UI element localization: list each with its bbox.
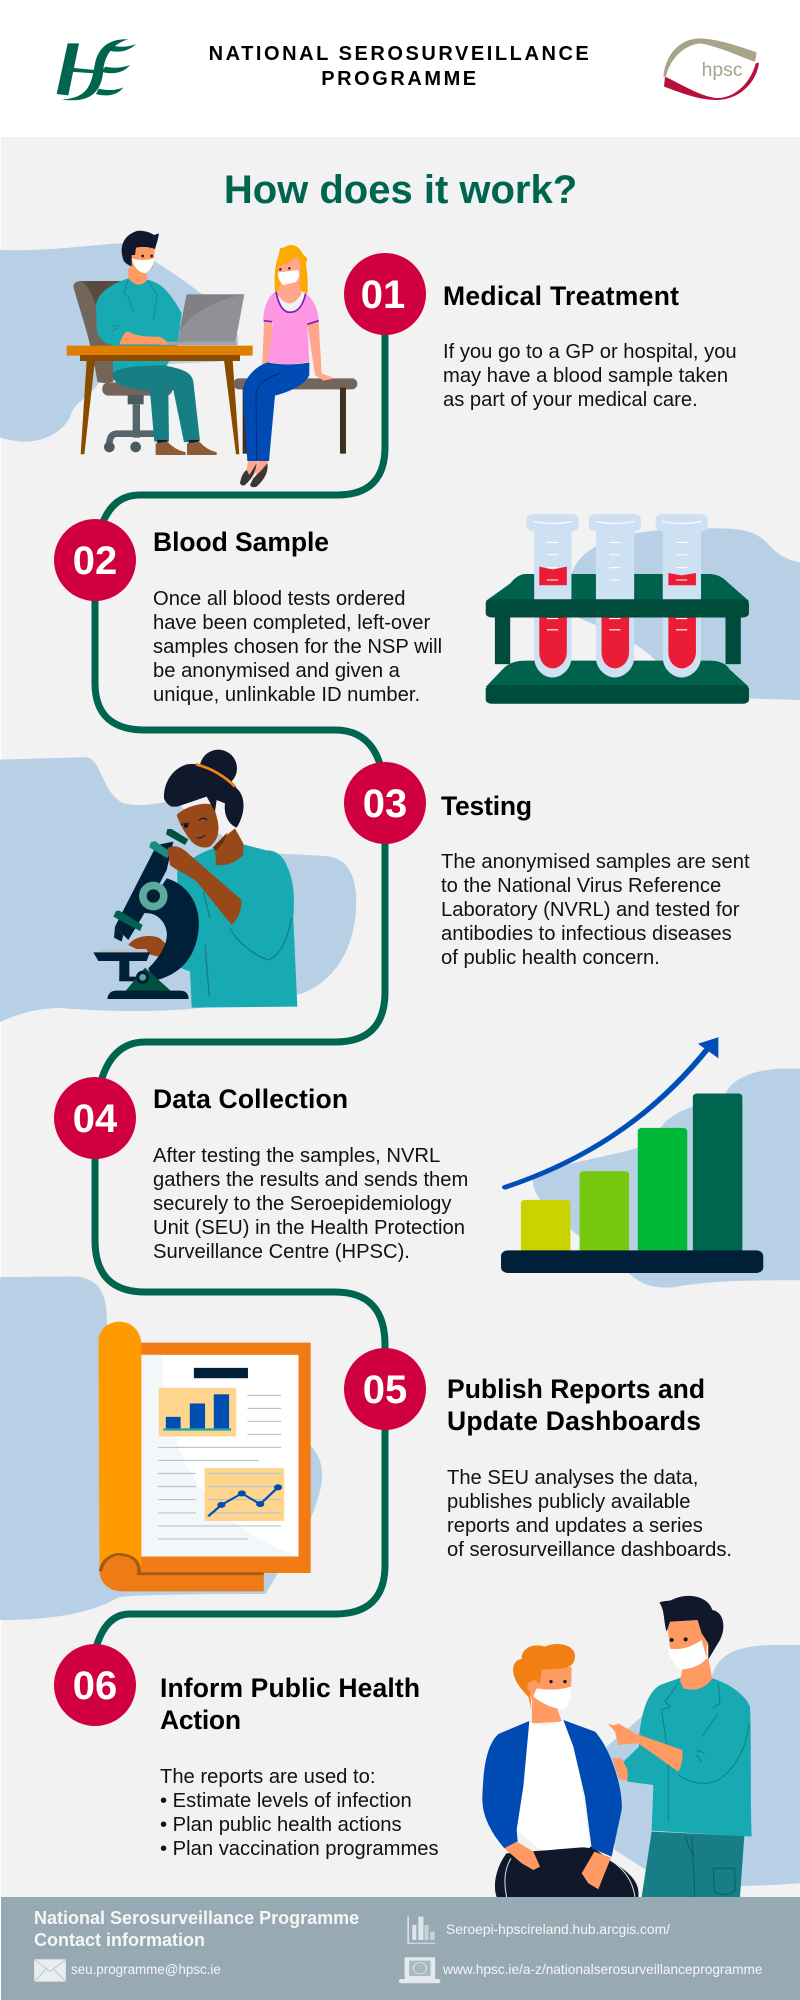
website link: www.hpsc.ie/a-z/nationalserosurveillanceprogramme bbox=[442, 1962, 763, 1977]
body text: have been completed, left-over bbox=[153, 612, 430, 634]
icon: envelope bbox=[34, 1959, 66, 1982]
body text: After testing the samples, NVRL bbox=[153, 1145, 440, 1167]
heading: Testing: Testing bbox=[441, 791, 532, 821]
body text bbox=[441, 851, 750, 969]
title: programme name: NATIONAL SEROSURVEILLANCE bbox=[209, 43, 591, 65]
icon: HSE logo bbox=[57, 39, 136, 100]
connecting path bbox=[90, 294, 385, 1685]
step 03 bbox=[344, 762, 750, 969]
body text: may have a blood sample taken bbox=[443, 365, 728, 387]
body text: If you go to a GP or hospital, you bbox=[443, 341, 737, 363]
body text: Unit (SEU) in the Health Protection bbox=[153, 1217, 465, 1239]
heading: Inform Public Health Action: Inform Public Health bbox=[160, 1673, 420, 1703]
body text: reports and updates a series bbox=[447, 1515, 703, 1537]
heading: Medical Treatment: Medical Treatment bbox=[443, 281, 679, 311]
step 01 bbox=[344, 253, 737, 411]
header band bbox=[57, 38, 759, 100]
body text: to the National Virus Reference bbox=[441, 875, 721, 897]
body text bbox=[153, 588, 442, 706]
heading: How does it work? bbox=[224, 168, 577, 212]
title: programme name: PROGRAMME bbox=[321, 68, 479, 90]
number badge 02 bbox=[54, 519, 136, 601]
body text: of public health concern. bbox=[441, 947, 660, 969]
icon: laptop globe bbox=[399, 1957, 440, 1983]
illustration: scientist with microscope bbox=[93, 750, 297, 1008]
body text: unique, unlinkable ID number. bbox=[153, 684, 420, 706]
body text: of serosurveillance dashboards. bbox=[447, 1539, 732, 1561]
heading: Publish Reports and Update Dashboards: Update Dashboards bbox=[447, 1406, 701, 1436]
number badge 01 bbox=[344, 253, 426, 335]
heading: Inform Public Health Action: Action bbox=[160, 1705, 241, 1735]
body text: The reports are used to: bbox=[160, 1766, 375, 1788]
footer heading: National Serosurveillance Programme bbox=[34, 1908, 359, 1928]
body text bbox=[160, 1766, 439, 1860]
number badge 03: 03 bbox=[363, 782, 407, 826]
icon: hpsc logo bbox=[663, 38, 759, 100]
number badge 05: 05 bbox=[363, 1368, 407, 1412]
dashboard link: Seroepi-hpscireland.hub.arcgis.com/ bbox=[446, 1922, 670, 1937]
number badge 04 bbox=[54, 1077, 136, 1159]
body text: antibodies to infectious diseases bbox=[441, 923, 732, 945]
number badge 03 bbox=[344, 762, 426, 844]
icon: dashboard bars bbox=[408, 1917, 435, 1943]
body text bbox=[153, 1145, 468, 1263]
heading: Publish Reports and Update Dashboards: Publish Reports and bbox=[447, 1374, 705, 1404]
number badge 01: 01 bbox=[361, 273, 405, 317]
heading: Blood Sample: Blood Sample bbox=[153, 527, 329, 557]
step 05 bbox=[344, 1348, 732, 1561]
bar chart with rising arrow bbox=[501, 1037, 763, 1273]
heading: Inform Public Health Action bbox=[160, 1673, 420, 1735]
body text: Laboratory (NVRL) and tested for bbox=[441, 899, 740, 921]
body text: • Plan public health actions bbox=[160, 1814, 402, 1836]
heading: Data Collection: Data Collection bbox=[153, 1084, 348, 1114]
body text bbox=[447, 1467, 732, 1561]
body text bbox=[443, 341, 737, 411]
footer heading bbox=[34, 1908, 359, 1950]
heading: Publish Reports and Update Dashboards bbox=[447, 1374, 705, 1436]
body text: samples chosen for the NSP will bbox=[153, 636, 442, 658]
body text: as part of your medical care. bbox=[443, 389, 698, 411]
body text: be anonymised and given a bbox=[153, 660, 401, 682]
number badge 06 bbox=[54, 1644, 136, 1726]
title: programme name bbox=[209, 43, 591, 90]
footer heading: Contact information bbox=[34, 1930, 205, 1950]
body text: securely to the Seroepidemiology bbox=[153, 1193, 452, 1215]
email: seu.programme@hpsc.ie bbox=[71, 1962, 221, 1977]
step 04 bbox=[54, 1077, 468, 1263]
illustration: report folder bbox=[98, 1322, 311, 1591]
number badge 04: 04 bbox=[73, 1097, 118, 1141]
body text: Surveillance Centre (HPSC). bbox=[153, 1241, 410, 1263]
step 02 bbox=[54, 519, 442, 706]
illustration: doctor and patient at desk bbox=[67, 231, 357, 487]
number badge 05 bbox=[344, 1348, 426, 1430]
body text: • Plan vaccination programmes bbox=[160, 1838, 439, 1860]
body text: The anonymised samples are sent bbox=[441, 851, 750, 873]
number badge 06: 06 bbox=[73, 1664, 117, 1708]
footer panel bbox=[1, 1897, 800, 2000]
illustration: blood test tube rack bbox=[486, 514, 749, 704]
step 06 bbox=[54, 1644, 439, 1860]
body text: • Estimate levels of infection bbox=[160, 1790, 412, 1812]
body text: Once all blood tests ordered bbox=[153, 588, 406, 610]
body text: gathers the results and sends them bbox=[153, 1169, 468, 1191]
icon: hpsc logo: hpsc bbox=[702, 60, 743, 81]
number badge 02: 02 bbox=[73, 539, 117, 583]
body text: publishes publicly available bbox=[447, 1491, 691, 1513]
body text: The SEU analyses the data, bbox=[447, 1467, 698, 1489]
illustration: doctor talking to patient bbox=[482, 1596, 752, 1897]
